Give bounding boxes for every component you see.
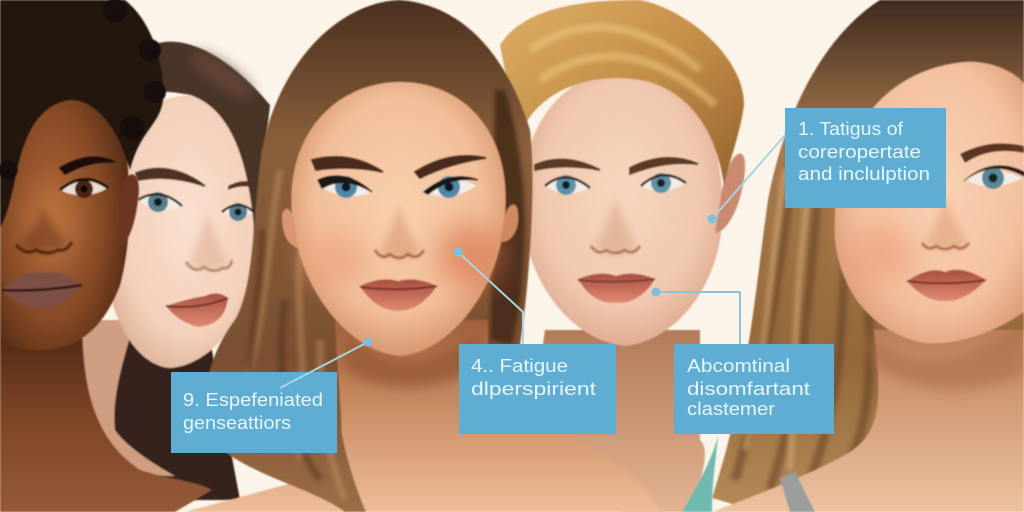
portrait: blond man <box>500 0 745 512</box>
connector: callout 1 <box>708 135 785 224</box>
portrait: dark-skinned woman <box>0 0 212 512</box>
callout: abdominal: clastemer <box>687 399 775 419</box>
callout: abdominal: Abcomtinal <box>687 356 790 376</box>
portrait: right woman <box>712 0 1024 512</box>
callout: fatigue <box>459 344 616 434</box>
portrait: pale woman <box>75 42 270 500</box>
portrait: centre woman <box>185 0 660 512</box>
connector: callout 4 <box>454 248 523 344</box>
callout: fatigue: 4.. Fatigue <box>471 356 568 376</box>
callout: corporate: coreropertate <box>798 142 921 162</box>
callout: corporate: 1. Tatigus of <box>798 119 904 139</box>
connector: callout 9 <box>280 338 372 388</box>
callout: abdominal: disomfartant <box>687 379 810 399</box>
callout: abdominal <box>674 344 834 434</box>
callout: corporate <box>785 108 946 208</box>
connector: callout abdominal <box>652 288 740 344</box>
callout: generations <box>171 372 337 453</box>
callout: generations: genseattiors <box>183 413 291 433</box>
callout: fatigue: dlperspirient <box>471 379 596 399</box>
callout: generations: 9. Espefeniated <box>183 390 323 410</box>
callout: corporate: and inclulption <box>798 164 930 184</box>
